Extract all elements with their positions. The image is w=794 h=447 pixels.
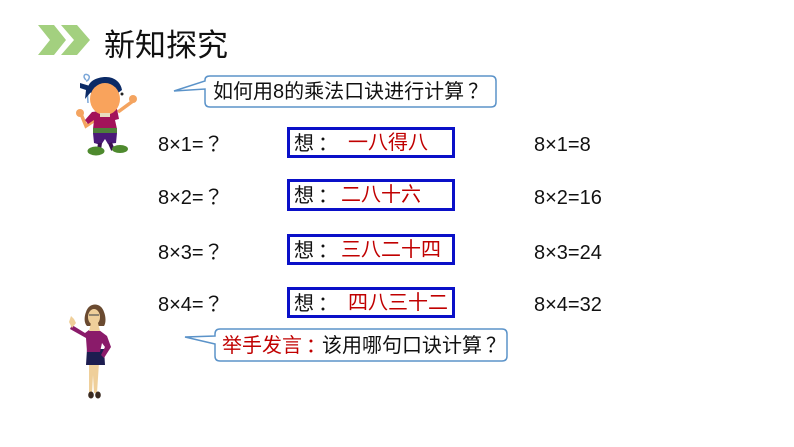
illustration: girl waving [76, 74, 137, 156]
equation 8×4: 8×4=？ [158, 288, 224, 317]
thinking box 4: 四八三十二 [348, 292, 448, 314]
thinking box 3: 想： [294, 234, 338, 263]
thinking box 3 [287, 234, 455, 265]
bubble text: prompt: 举手发言：该用哪句口诀计算？ [222, 329, 506, 358]
answer 8×3: 8×3=24 [534, 242, 602, 264]
equation 8×1: 8×1=？ [158, 128, 224, 157]
speech bubble: prompt [184, 328, 508, 362]
thinking box 2: 二八十六 [341, 184, 421, 206]
thinking box 2: 想： [294, 179, 338, 208]
thinking box 4: 想： [294, 287, 338, 316]
thinking box 1: 想： [294, 127, 338, 156]
answer 8×4: 8×4=32 [534, 294, 602, 316]
icon: double green chevrons [38, 25, 90, 55]
illustration: teacher [69, 304, 111, 398]
thinking box 1 [287, 127, 455, 158]
speech bubble: question [174, 75, 497, 108]
answer 8×2: 8×2=16 [534, 187, 602, 209]
equation 8×3: 8×3=？ [158, 236, 224, 265]
bubble text: question: 如何用8的乘法口诀进行计算？ [213, 75, 488, 104]
thinking box 1: 一八得八 [348, 132, 428, 154]
equation 8×2: 8×2=？ [158, 181, 224, 210]
thinking box 3: 三八二十四 [341, 239, 441, 261]
title: 新知探究 [104, 20, 228, 65]
thinking box 2 [287, 179, 455, 211]
answer 8×1: 8×1=8 [534, 134, 591, 156]
thinking box 4 [287, 287, 455, 318]
